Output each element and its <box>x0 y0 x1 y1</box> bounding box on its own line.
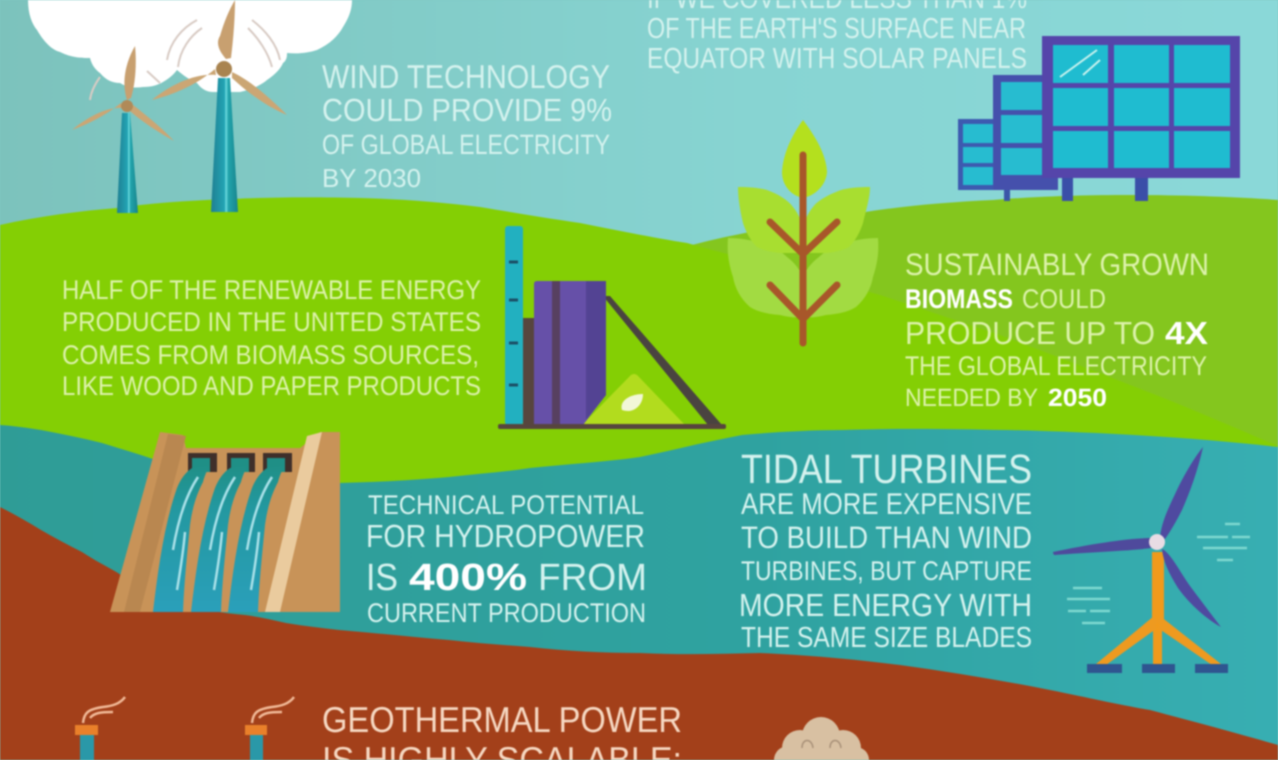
cloud <box>28 0 352 92</box>
icon: geothermal vent left <box>75 697 125 760</box>
text: biomass potential: SUSTAINABLY GROWN <box>905 247 1209 282</box>
icon: large wind turbine <box>152 0 287 212</box>
text: wind technology: COULD PROVIDE 9% <box>322 92 612 128</box>
text: solar panels: EQUATOR WITH SOLAR PANELS <box>647 43 1027 75</box>
text: hydropower: FROM <box>538 557 647 599</box>
text: tidal turbines: TIDAL TURBINES <box>741 446 1032 492</box>
text: biomass share: COMES FROM BIOMASS SOURCES, <box>62 340 479 370</box>
text: biomass share <box>62 275 481 401</box>
text: wind technology: OF GLOBAL ELECTRICITY <box>322 129 610 160</box>
text: hydropower <box>366 490 647 628</box>
front hill: bright green <box>0 197 1278 500</box>
text: biomass share: LIKE WOOD AND PAPER PRODUCTS <box>62 371 481 401</box>
icon: geothermal vent right <box>245 697 294 760</box>
text: tidal turbines: ARE MORE EXPENSIVE <box>741 488 1032 521</box>
icon: small wind turbine <box>72 46 174 213</box>
text: tidal turbines: TURBINES, BUT CAPTURE <box>741 556 1032 586</box>
text: wind technology: WIND TECHNOLOGY <box>322 58 610 95</box>
water layer <box>0 425 1278 760</box>
text: tidal turbines: TO BUILD THAN WIND <box>741 520 1032 555</box>
text: solar panels: OF THE EARTH'S SURFACE NEAR <box>647 13 1026 45</box>
icon: hydro dam <box>110 432 340 612</box>
icon: tidal turbine <box>1053 447 1228 673</box>
soil layer <box>0 507 1278 760</box>
text: wind technology: BY 2030 <box>322 163 421 193</box>
text: biomass potential: NEEDED BY <box>905 384 1038 412</box>
text: hydropower: FOR HYDROPOWER <box>366 518 645 554</box>
text: hydropower: 400% <box>409 557 527 599</box>
text: biomass potential: BIOMASS <box>905 284 1013 314</box>
text: geothermal power: GEOTHERMAL POWER <box>322 699 682 740</box>
text: hydropower: CURRENT PRODUCTION <box>367 598 646 628</box>
text: biomass share: PRODUCED IN THE UNITED STATES <box>62 307 481 337</box>
text: biomass potential: COULD <box>1022 284 1106 314</box>
text: hydropower: IS <box>366 557 398 599</box>
back hill: dark green <box>640 195 1278 470</box>
icon: solar panels <box>958 36 1240 201</box>
text: geothermal power <box>322 699 682 760</box>
icon: steam cloud <box>774 717 869 760</box>
icon: biomass plant <box>728 120 878 343</box>
icon: biomass power plant <box>498 226 726 429</box>
text: biomass potential: THE GLOBAL ELECTRICITY <box>905 351 1207 381</box>
text: tidal turbines: THE SAME SIZE BLADES <box>741 622 1032 654</box>
text: biomass potential: 2050 <box>1048 384 1107 412</box>
text: biomass share: HALF OF THE RENEWABLE ENERGY <box>62 275 481 305</box>
water dashes <box>1067 524 1250 623</box>
text: hydropower: TECHNICAL POTENTIAL <box>368 490 644 520</box>
text: tidal turbines <box>739 446 1032 654</box>
text: solar panels <box>647 0 1027 75</box>
text: biomass potential: PRODUCE UP TO <box>905 315 1155 351</box>
text: biomass potential: 4X <box>1165 315 1209 351</box>
text: biomass potential <box>905 247 1209 412</box>
wind motion arcs <box>90 20 280 100</box>
text: tidal turbines: MORE ENERGY WITH <box>739 587 1032 623</box>
text: wind technology <box>322 58 612 193</box>
